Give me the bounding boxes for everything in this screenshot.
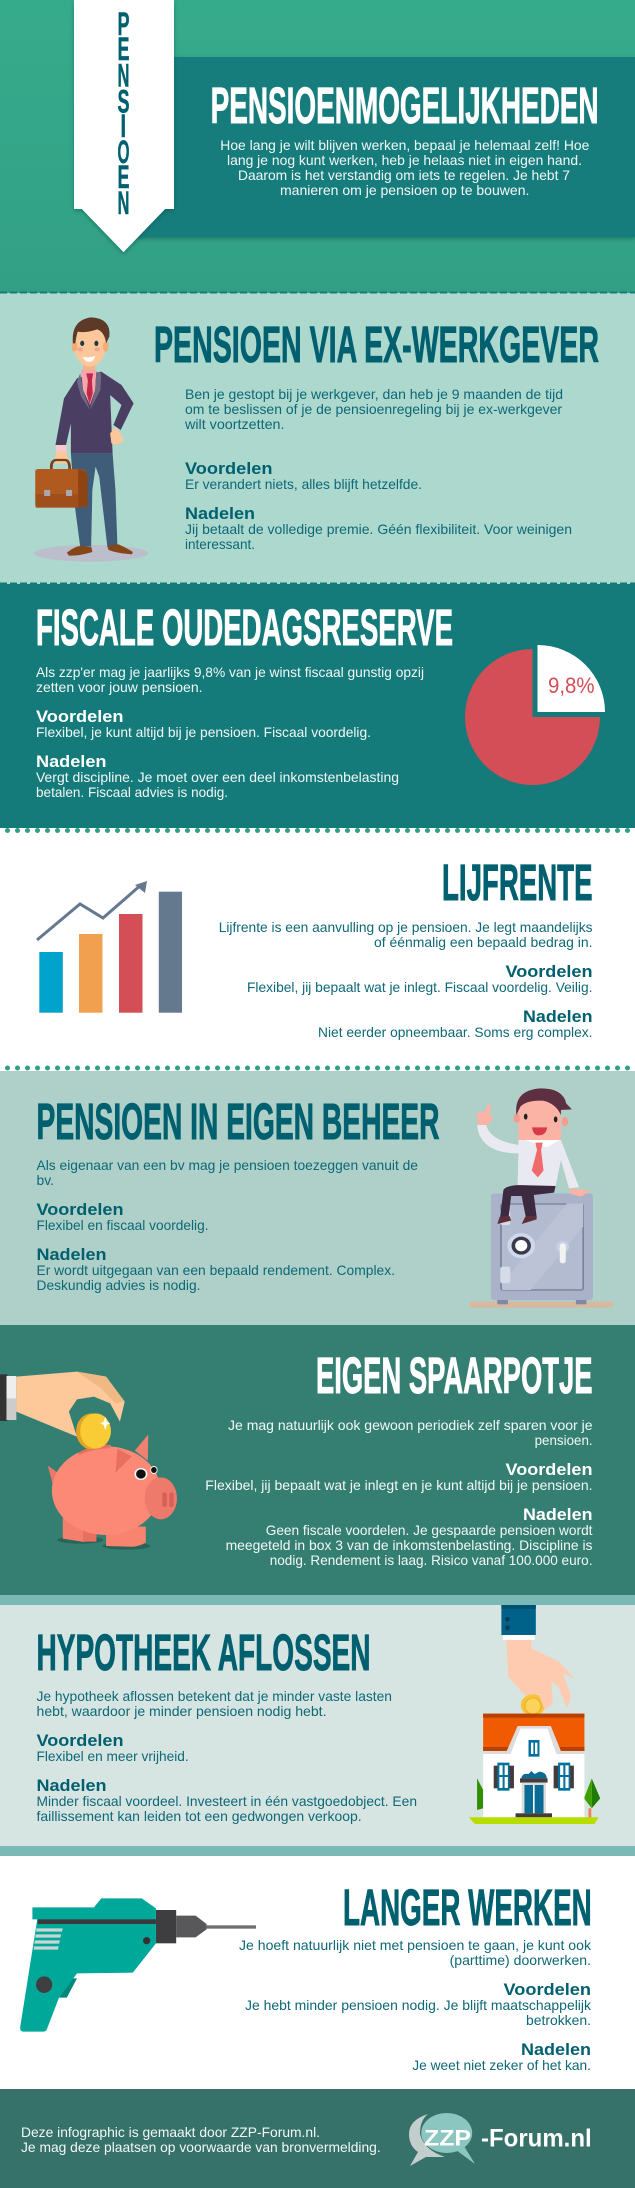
nadelen: Er wordt uitgegaan van een bepaald rendement. Complex. [36, 1262, 395, 1278]
voordelen [36, 1200, 208, 1233]
voordelen [36, 707, 371, 740]
nadelen: faillissement kan leiden tot een gedwongen verkoop. [36, 1808, 362, 1824]
nadelen [226, 1505, 593, 1568]
nadelen: Niet eerder opneembaar. Soms erg complex. [318, 1024, 592, 1040]
intro text [228, 1417, 593, 1448]
voordelen: Flexibel en meer vrijheid. [36, 1748, 189, 1764]
voordelen: betrokken. [526, 2012, 591, 2028]
intro text: hebt, waardoor je minder pensioen nodig hebt. [36, 1703, 326, 1719]
panel: hypotheek aflossen [0, 1595, 635, 1856]
ribbon: pensioen: I [120, 108, 126, 144]
nadelen: Nadelen [36, 1776, 106, 1795]
intro text: lang je nog kunt werken, heb je helaas niet in eigen hand. [227, 152, 582, 168]
intro text: Ben je gestopt bij je werkgever, dan heb je 9 maanden de tijd [185, 386, 563, 402]
intro text: pensioen. [535, 1432, 593, 1448]
voordelen [247, 962, 592, 995]
panel: lijfrente [0, 828, 635, 1071]
credit text: Deze infographic is gemaakt door ZZP-Forum.nl. [21, 2124, 320, 2140]
nadelen: interessant. [185, 536, 255, 552]
intro text: Je mag natuurlijk ook gewoon periodiek zelf sparen voor je [228, 1417, 593, 1433]
intro text [36, 1157, 418, 1188]
ribbon: pensioen: N [118, 58, 130, 94]
intro text: zetten voor jouw pensioen. [36, 679, 202, 695]
voordelen: Voordelen [36, 1731, 123, 1750]
icon: businessman with briefcase [34, 317, 148, 562]
voordelen: Er verandert niets, alles blijft hetzelfde. [185, 476, 422, 492]
icon: man sitting on a safe [469, 1088, 614, 1308]
voordelen [245, 1980, 592, 2028]
nadelen: Je weet niet zeker of het kan. [412, 2057, 591, 2073]
voordelen: Voordelen [506, 962, 592, 981]
ribbon: pensioen [74, 0, 174, 252]
intro text [184, 386, 563, 432]
voordelen: Voordelen [36, 707, 124, 726]
nadelen: Jij betaalt de volledige premie. Géén flexibiliteit. Voor weinigen [185, 521, 572, 537]
icon: rising bar chart [37, 881, 182, 1013]
intro text: of éénmalig een bepaald bedrag in. [374, 934, 592, 950]
intro text [219, 919, 592, 950]
voordelen: Voordelen [506, 1460, 592, 1479]
intro text: bv. [36, 1172, 54, 1188]
voordelen: Flexibel en fiscaal voordelig. [36, 1217, 208, 1233]
heading: HYPOTHEEK AFLOSSEN [36, 1624, 370, 1681]
ribbon: pensioen: E [118, 159, 130, 195]
intro text: manieren om je pensioen op te bouwen. [280, 182, 529, 198]
nadelen: Nadelen [185, 504, 255, 523]
intro text: Als eigenaar van een bv mag je pensioen toezeggen vanuit de [36, 1157, 418, 1173]
voordelen: Voordelen [185, 459, 272, 478]
nadelen: meegeteld in box 3 van de inkomstenbelasting. Discipline is [226, 1537, 592, 1553]
credit text [21, 2124, 381, 2155]
intro text: Daarom is het verstandig om iets te regelen. Je hebt 7 [238, 167, 570, 183]
nadelen: Nadelen [521, 2040, 591, 2059]
voordelen: Voordelen [36, 1200, 123, 1219]
nadelen [185, 504, 572, 552]
header band [120, 57, 635, 237]
nadelen [318, 1007, 592, 1040]
pie chart: 9,8%: 9,8% [548, 673, 595, 698]
ribbon: pensioen: S [118, 84, 130, 120]
voordelen: Flexibel, jij bepaalt wat je inlegt en je kunt altijd bij je pensioen. [205, 1477, 593, 1493]
credit text: Je mag deze plaatsen op voorwaarde van bronvermelding. [21, 2139, 381, 2155]
nadelen: Nadelen [523, 1007, 592, 1026]
intro text: Als zzp'er mag je jaarlijks 9,8% van je winst fiscaal gunstig opzij [36, 664, 424, 680]
panel: header [0, 0, 635, 293]
voordelen [36, 1731, 189, 1764]
nadelen [36, 1776, 417, 1824]
voordelen: Voordelen [504, 1980, 591, 1999]
nadelen [412, 2040, 591, 2073]
panel: langer werken [0, 1856, 635, 2089]
dotted divider [8, 828, 635, 833]
nadelen: nodig. Rendement is laag. Risico vanaf 100.000 euro. [270, 1552, 592, 1568]
panel: eigen spaarpotje [0, 1325, 635, 1595]
dotted divider [8, 1066, 635, 1070]
intro text [36, 1688, 392, 1719]
nadelen: Minder fiscaal voordeel. Investeert in één vastgoedobject. Een [36, 1793, 417, 1809]
logo: zzp-forum.nl: -Forum.nl [481, 2124, 592, 2152]
voordelen: Flexibel, jij bepaalt wat je inlegt. Fiscaal voordelig. Veilig. [247, 979, 592, 995]
intro text: om te beslissen of je de pensioenregeling bij je ex-werkgever [185, 401, 562, 417]
nadelen [36, 1245, 395, 1293]
intro text [36, 664, 424, 695]
intro text: Je hoeft natuurlijk niet met pensioen te gaan, je kunt ook [239, 1937, 592, 1953]
panel: pensioen in eigen beheer [0, 1071, 635, 1325]
icon: power drill [20, 1898, 256, 2032]
panel: pensioen via ex-werkgever [0, 292, 635, 584]
icon: hand dropping coin into house [469, 1605, 600, 1824]
intro text: wilt voortzetten. [184, 416, 284, 432]
nadelen: betalen. Fiscaal advies is nodig. [36, 784, 228, 800]
intro text: (parttime) doorwerken. [450, 1952, 591, 1968]
pie chart: 9,8% [465, 645, 605, 785]
intro text: Je hypotheek aflossen betekent dat je minder vaste lasten [36, 1688, 392, 1704]
panel: footer [0, 2089, 635, 2188]
icon: hand dropping coin in piggy bank [0, 1372, 177, 1550]
voordelen [205, 1460, 593, 1493]
ribbon: pensioen: E [118, 31, 130, 67]
intro text [239, 1937, 592, 1968]
nadelen: Nadelen [523, 1505, 592, 1524]
intro text: Lijfrente is een aanvulling op je pensioen. Je legt maandelijks [219, 919, 592, 935]
ribbon: pensioen: N [118, 185, 130, 221]
voordelen: Flexibel, je kunt altijd bij je pensioen. Fiscaal voordelig. [36, 724, 371, 740]
voordelen [185, 459, 422, 492]
nadelen: Deskundig advies is nodig. [36, 1277, 200, 1293]
intro text [220, 137, 590, 198]
nadelen: Geen fiscale voordelen. Je gespaarde pensioen wordt [266, 1522, 593, 1538]
nadelen: Nadelen [36, 752, 106, 771]
nadelen [36, 752, 399, 800]
intro text: Hoe lang je wilt blijven werken, bepaal je helemaal zelf! Hoe [220, 137, 590, 153]
ribbon: pensioen: O [118, 134, 130, 170]
panel: fiscale oudedagsreserve [0, 584, 635, 829]
logo: zzp-forum.nl [409, 2113, 592, 2166]
logo: zzp-forum.nl: ZZP [424, 2126, 471, 2150]
nadelen: Nadelen [36, 1245, 106, 1264]
nadelen: Vergt discipline. Je moet over een deel inkomstenbelasting [36, 769, 399, 785]
ribbon: pensioen: P [118, 6, 130, 42]
voordelen: Je hebt minder pensioen nodig. Je blijft maatschappelijk [245, 1997, 592, 2013]
